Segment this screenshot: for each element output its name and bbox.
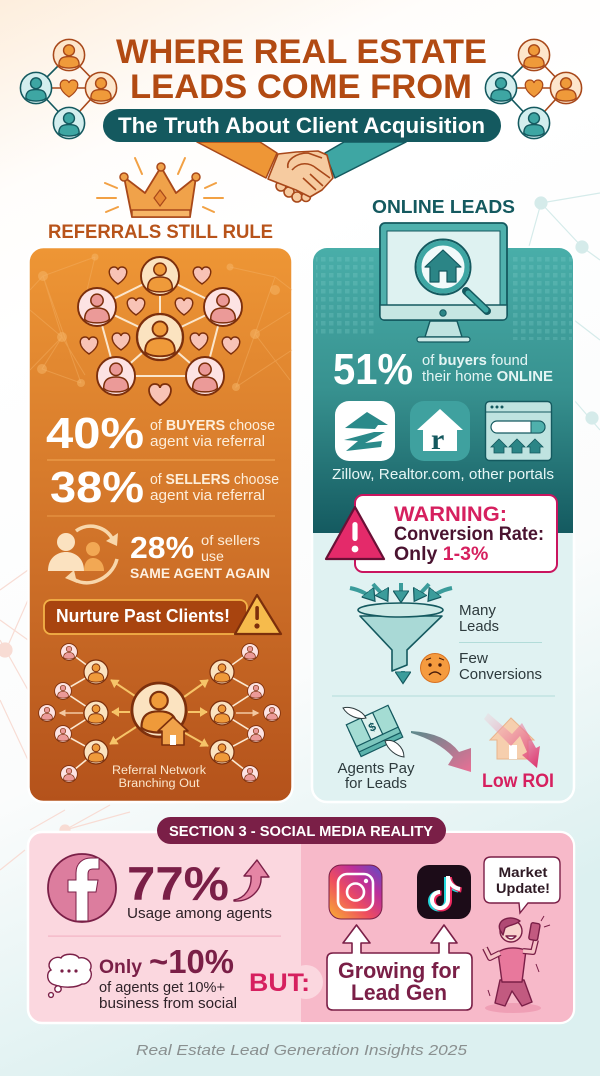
text: few conversions: Conversions	[459, 667, 542, 683]
stat: 77%	[127, 857, 272, 922]
stat: 77%: 77%	[127, 857, 229, 910]
arrow: pay to low roi	[411, 731, 471, 772]
callout: warning conversion rate: Conversion Rate:	[394, 523, 544, 545]
callout: nurture past clients: Nurture Past Clients!	[56, 606, 230, 626]
banner: section 3	[157, 817, 446, 844]
stat: 38% sellers: 38%	[50, 463, 144, 512]
heading: online leads: ONLINE LEADS	[372, 196, 515, 217]
stat: 40% buyers	[46, 409, 275, 458]
icon: repeat client	[48, 526, 118, 583]
icon: right people network	[485, 39, 582, 139]
text: but: BUT:	[249, 969, 310, 997]
stat: 28% same agent: use	[201, 548, 224, 564]
title: LEADS COME FROM	[130, 68, 472, 106]
callout: warning conversion rate: Only 1-3%	[394, 543, 488, 565]
stat: 28% same agent	[130, 530, 270, 581]
panel: referrals	[28, 247, 292, 802]
icon: zillow	[335, 401, 395, 461]
icon: portals browser	[486, 402, 552, 460]
heading: referrals: REFERRALS STILL RULE	[48, 222, 273, 243]
callout: growing for lead gen: Lead Gen	[351, 980, 447, 1005]
text: many leads	[459, 603, 499, 635]
stat: 28% same agent: SAME AGENT AGAIN	[130, 565, 270, 581]
icon: people referral network	[78, 257, 242, 405]
subtitle pill: The Truth About Client Acquisition	[118, 113, 485, 138]
header	[20, 33, 582, 202]
icon: realtor: r	[431, 423, 444, 456]
panel: online leads	[312, 223, 574, 802]
stat: 51%: 51%	[333, 345, 413, 394]
stat: 28% same agent: of sellers	[201, 532, 260, 548]
stat: 51%	[333, 345, 553, 394]
stat: 28% same agent: 28%	[130, 530, 194, 565]
icon: warning triangle pink	[326, 507, 384, 559]
icon: warning triangle	[235, 595, 281, 634]
footer: Real Estate Lead Generation Insights 2025	[136, 1042, 468, 1059]
stat: 10%	[99, 943, 237, 1012]
text: few conversions: Few	[459, 651, 489, 667]
subtitle pill	[103, 109, 501, 142]
caption: portals: Zillow, Realtor.com, other portals	[332, 466, 554, 483]
callout: growing for lead gen	[327, 925, 472, 1010]
callout: warning conversion rate	[326, 495, 557, 572]
panel: social media	[28, 817, 574, 1023]
banner: section 3: SECTION 3 - SOCIAL MEDIA REALITY	[169, 824, 433, 840]
stat: 10%: of agents get 10%+	[99, 980, 225, 996]
icon: crown	[97, 158, 223, 217]
title	[116, 33, 487, 106]
title: WHERE REAL ESTATE	[116, 33, 487, 71]
text: many leads: Many	[459, 603, 497, 619]
text: few conversions	[459, 651, 542, 683]
icon: monitor with magnifier	[380, 223, 507, 342]
text: agents pay for leads: Agents Pay	[338, 761, 415, 777]
stat: 40% buyers: of BUYERS choose	[150, 418, 275, 434]
diagram: referral network branching	[39, 644, 280, 790]
icon: thought bubble	[48, 954, 91, 997]
callout: growing for lead gen: Growing for	[338, 958, 460, 983]
icon: facebook	[48, 854, 116, 922]
icon: house	[158, 717, 188, 745]
icon: handshake	[197, 142, 406, 202]
diagram: referral network branching: Referral Network	[112, 765, 206, 777]
stat: 51%: their home ONLINE	[422, 369, 553, 385]
background network: teal right	[528, 193, 600, 430]
icon: up arrow	[234, 860, 269, 901]
stat: 40% buyers: agent via referral	[150, 434, 265, 450]
text: agents pay for leads: for Leads	[345, 776, 407, 792]
stat: 10%: business from social	[99, 996, 237, 1012]
text: agents pay for leads	[338, 761, 415, 792]
icon: flying money: $	[366, 719, 378, 735]
text: low roi: Low ROI	[482, 771, 554, 792]
diagram: referral network branching: Branching Out	[118, 778, 200, 790]
stat: 38% sellers: agent via referral	[150, 488, 265, 504]
speech bubble: market update	[484, 857, 560, 913]
stat: 40% buyers: 40%	[46, 409, 144, 458]
callout: warning conversion rate: WARNING:	[394, 503, 507, 526]
icon: excited agent	[485, 918, 541, 1013]
icon: instagram	[329, 865, 382, 919]
stat: 51%: of buyers found	[422, 353, 528, 369]
background network: pink left	[0, 570, 130, 870]
stat: 10%: Only	[99, 957, 142, 978]
icon: flying money	[343, 705, 404, 757]
icon: realtor	[410, 401, 470, 461]
stat: 10%: ~10%	[149, 943, 234, 980]
speech bubble: market update: Market	[498, 864, 548, 880]
callout: nurture past clients	[44, 595, 281, 634]
icon: sad face	[420, 654, 450, 682]
speech bubble: market update: Update!	[496, 880, 550, 896]
icon: tiktok	[417, 865, 471, 919]
text: many leads: Leads	[459, 619, 499, 635]
icon: falling house	[484, 713, 540, 768]
stat: 77%: Usage among agents	[127, 906, 272, 922]
stat: 38% sellers	[50, 463, 279, 512]
icon: left people network	[20, 39, 117, 139]
icon: funnel	[350, 583, 452, 682]
stat: 38% sellers: of SELLERS choose	[150, 472, 279, 488]
